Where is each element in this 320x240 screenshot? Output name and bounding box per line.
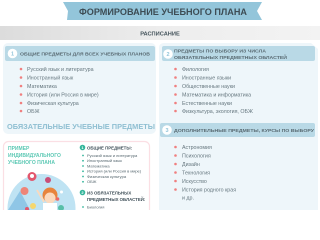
- header 3: ДОПОЛНИТЕЛЬНЫЕ ПРЕДМЕТЫ, КУРСЫ ПО ВЫБОРУ: [174, 128, 314, 133]
- list of additional subjects: История родного края: [182, 188, 236, 194]
- panel: elective subjects: [159, 43, 318, 210]
- sample plan heading: ИНДИВИДУАЛЬНОГО: [8, 153, 61, 159]
- list of common subjects: Русский язык и литература: [27, 66, 94, 73]
- heading: compulsory subjects: ОБЯЗАТЕЛЬНЫЕ УЧЕБНЫЕ ПРЕДМЕТЫ: [7, 122, 155, 131]
- list of common subjects: Математика: [27, 84, 57, 90]
- header 2: 2: [166, 52, 170, 58]
- panel: sample individual plan: [4, 142, 150, 240]
- panel: common subjects: [3, 43, 156, 134]
- header 1: ОБЩИЕ ПРЕДМЕТЫ ДЛЯ ВСЕХ УЧЕБНЫХ ПЛАНОВ: [20, 51, 151, 56]
- list of common subjects: Физическая культура: [27, 101, 79, 107]
- list: general subjects: 1: [81, 145, 84, 150]
- list: general subjects: Иностранный язык: [87, 158, 122, 163]
- list: general subjects: ОБЩИЕ ПРЕДМЕТЫ:: [87, 146, 133, 150]
- list of common subjects: Иностранный язык: [27, 74, 74, 82]
- title ribbon: ФОРМИРОВАНИЕ УЧЕБНОГО ПЛАНА: [79, 7, 247, 17]
- header 1: 1: [11, 52, 14, 58]
- list of common subjects: [20, 66, 99, 115]
- list of elective subjects: Филология: [182, 67, 209, 73]
- list of additional subjects: Дизайн: [182, 161, 200, 168]
- schedule heading bar: РАСПИСАНИЕ: [140, 32, 180, 38]
- header 3: [160, 123, 315, 137]
- list: compulsory subject areas: ПРЕДМЕТНЫХ ОБЛАСТЕЙ:: [87, 197, 146, 202]
- list: compulsory subject areas: ИЗ ОБЯЗАТЕЛЬНЫХ: [87, 190, 131, 196]
- list of elective subjects: Общественные науки: [182, 84, 235, 90]
- list of additional subjects: Искусство: [182, 179, 207, 185]
- list of elective subjects: Иностранные языки: [182, 76, 231, 82]
- list of elective subjects: [174, 67, 253, 115]
- header 1: [5, 46, 155, 61]
- list: compulsory subject areas: 2: [81, 190, 84, 195]
- list: general subjects: Математика: [87, 164, 110, 168]
- list of elective subjects: Естественные науки: [182, 101, 232, 107]
- list: general subjects: [80, 145, 142, 184]
- list of additional subjects: Психология: [182, 154, 211, 160]
- illustration: girl with school subjects: [8, 172, 76, 240]
- list of additional subjects: Астрономия: [182, 145, 212, 151]
- list of elective subjects: Математика и информатика: [182, 92, 251, 98]
- list of common subjects: История (или Россия в мире): [27, 92, 99, 98]
- list: general subjects: ОБЖ: [87, 179, 97, 184]
- list of additional subjects: [174, 145, 236, 202]
- list: compulsory subject areas: [80, 190, 146, 210]
- header 2: ОБЯЗАТЕЛЬНЫХ ПРЕДМЕТНЫХ ОБЛАСТЕЙ: [174, 53, 288, 60]
- list of additional subjects: и др.: [182, 196, 194, 202]
- sample plan heading: [8, 146, 61, 166]
- list of common subjects: ОБЖ: [27, 109, 40, 115]
- list: compulsory subject areas: Биология: [87, 204, 104, 210]
- header 2: [162, 46, 315, 61]
- list: general subjects: Физическая культура: [87, 174, 127, 179]
- sample plan heading: ПРИМЕР: [8, 146, 30, 152]
- title ribbon: [63, 2, 262, 20]
- list: general subjects: Русский язык и литература: [87, 153, 138, 158]
- sample plan heading: УЧЕБНОГО ПЛАНА: [8, 160, 55, 166]
- list of additional subjects: Технология: [182, 170, 210, 176]
- header 3: 3: [165, 128, 169, 134]
- list of elective subjects: Физкультура, экология, ОБЖ: [182, 109, 253, 115]
- list: general subjects: История (или Россия в мире): [87, 169, 142, 174]
- schedule heading bar: [0, 26, 320, 40]
- header 2: ПРЕДМЕТЫ ПО ВЫБОРУ ИЗ ЧИСЛА: [174, 48, 267, 53]
